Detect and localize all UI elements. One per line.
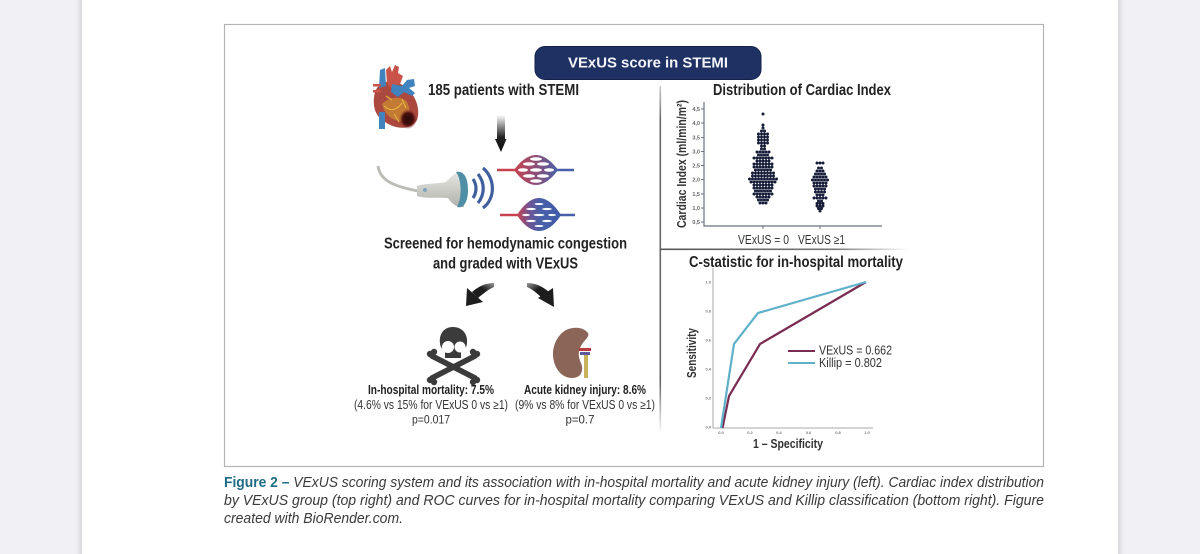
axes and ticks: 0.6 — [806, 430, 812, 435]
legend: VExUS = 0.662 — [819, 344, 892, 358]
outcome: acute kidney injury: (9% vs 8% for VExUS 0 vs ≥1) — [515, 398, 655, 412]
icon: capillary bed, high congestion — [500, 198, 575, 231]
legend — [788, 344, 892, 370]
outcome: acute kidney injury: p=0.7 — [566, 412, 595, 426]
swarm: VExUS = 0 — [750, 114, 777, 203]
outcome: mortality: In-hospital mortality: 7.5% — [368, 383, 494, 397]
screening text: Screened for hemodynamic congestion — [384, 236, 627, 252]
axes and ticks: 0.2 — [747, 430, 754, 435]
outcome: mortality — [354, 383, 508, 426]
swarm: VExUS >= 1 — [812, 163, 828, 211]
axes and ticks: 4,0 — [692, 121, 700, 127]
axes and ticks: 3,5 — [692, 136, 700, 142]
legend: Killip = 0.802 — [819, 356, 882, 370]
screening text: and graded with VExUS — [433, 256, 578, 272]
axes and ticks: 0.6 — [705, 338, 712, 342]
icon: capillary bed, low congestion — [497, 155, 574, 185]
curve: Killip — [721, 282, 866, 428]
figure frame — [224, 24, 1044, 466]
arrow: curved left — [466, 283, 494, 306]
axes and ticks: 0,5 — [692, 220, 700, 226]
axes and ticks: 0.8 — [835, 430, 842, 435]
icon: skull and crossbones — [427, 327, 480, 385]
title pill: VExUS score in STEMI — [568, 54, 728, 72]
axes and ticks: 0.2 — [705, 396, 712, 400]
group labels: VExUS ≥1 — [798, 233, 845, 247]
axes and ticks: 3,0 — [692, 150, 700, 156]
axes and ticks: 0.0 — [718, 430, 725, 435]
axes and ticks: 1.0 — [864, 430, 871, 435]
outcome: acute kidney injury: Acute kidney injury: 8.6% — [524, 383, 646, 397]
axes and ticks — [705, 268, 873, 435]
axes and ticks: 0.0 — [705, 424, 712, 430]
axes and ticks: 1,0 — [692, 206, 700, 212]
x axis label: 1 – Specificity — [753, 437, 823, 451]
icon: kidney — [553, 328, 591, 378]
icon: ultrasound probe — [378, 166, 492, 208]
panel: study flow (left) — [354, 65, 655, 426]
y axis label: Sensitivity — [685, 328, 699, 378]
group labels — [738, 233, 845, 247]
caption — [224, 475, 1044, 527]
panel: ROC curves — [685, 254, 903, 451]
screening text — [384, 236, 627, 272]
outcome: mortality: p=0.017 — [412, 412, 450, 426]
axes and ticks: 1,5 — [692, 192, 700, 198]
arrow: down — [495, 115, 506, 152]
patients text: 185 patients with STEMI — [428, 82, 579, 99]
title pill — [535, 46, 761, 80]
outcome: mortality: (4.6% vs 15% for VExUS 0 vs ≥1) — [354, 398, 508, 412]
heading: Distribution of Cardiac Index — [713, 82, 891, 99]
panel: distribution of cardiac index — [675, 82, 891, 247]
arrow: curved right — [527, 283, 554, 307]
axes and ticks: 2,0 — [692, 178, 700, 184]
caption: by VExUS group (top right) and ROC curves for in-hospital mortality comparing VExUS and Killip classification (bottom right). Figure — [224, 493, 1044, 509]
y axis label: Cardiac Index (ml/min/m²) — [675, 100, 689, 228]
axes and ticks: 0.8 — [705, 308, 712, 314]
curve: VExUS — [722, 282, 866, 428]
icon: heart — [373, 65, 418, 129]
heading: C-statistic for in-hospital mortality — [689, 254, 903, 271]
caption: Figure 2 – VExUS scoring system and its association with in-hospital mortality and acute kidney injury (left). Cardiac index distribution — [224, 475, 1044, 491]
caption: created with BioRender.com. — [224, 511, 403, 527]
axes and ticks: 0.4 — [776, 430, 783, 435]
axes and ticks: 1.0 — [705, 280, 712, 284]
axes and ticks — [692, 102, 882, 229]
axes and ticks: 0.4 — [705, 366, 712, 372]
axes and ticks: 2,5 — [692, 164, 700, 170]
outcome: acute kidney injury — [515, 383, 655, 426]
axes and ticks: 4,5 — [692, 107, 700, 113]
group labels: VExUS = 0 — [738, 233, 789, 247]
